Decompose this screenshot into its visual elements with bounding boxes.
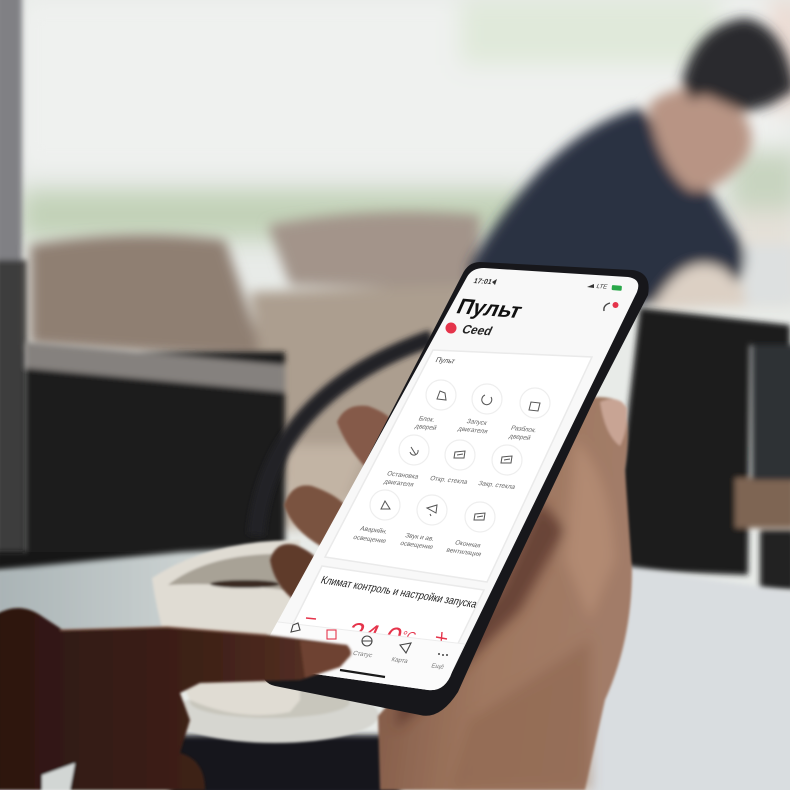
status bar <box>474 278 622 291</box>
finger two <box>284 485 345 547</box>
finger one <box>337 406 392 468</box>
button icons <box>381 391 540 520</box>
button labels: Откр. стекла <box>429 475 469 486</box>
home indicator <box>340 670 385 677</box>
button labels: Звук и ав. <box>404 532 436 543</box>
palm and thumb <box>378 397 632 790</box>
temperature value: 24.0 <box>341 617 407 654</box>
navigation labels <box>353 650 444 670</box>
status bar: LTE <box>595 283 608 291</box>
card: remote control <box>325 350 592 582</box>
screen title: Пульт <box>453 294 527 323</box>
button labels: двигателя <box>457 426 489 435</box>
man in the background <box>470 18 790 310</box>
button labels: двигателя <box>383 479 415 489</box>
coffee cup and saucer <box>152 540 379 743</box>
dark chair left <box>0 342 285 577</box>
navigation labels: Ещё <box>430 662 446 671</box>
thumb nail <box>600 399 627 446</box>
button labels: дверей <box>508 432 532 442</box>
card: climate control <box>293 565 485 643</box>
navigation labels: Статус <box>352 650 373 659</box>
button labels: Закр. стекла <box>477 480 517 491</box>
phone body <box>262 262 649 716</box>
button labels <box>352 415 538 558</box>
button labels: Разблок. <box>510 424 538 434</box>
vehicle selector: Ceed <box>460 323 495 338</box>
finger three <box>270 544 318 602</box>
bottom navigation <box>270 622 466 690</box>
wall on the left <box>0 0 27 570</box>
card heading: Пульт <box>434 355 457 365</box>
minus control <box>306 618 316 619</box>
climate heading: Климат контроль и настройки запуска <box>319 574 480 611</box>
dark chair right <box>256 308 790 590</box>
pointing hand <box>0 608 351 790</box>
shading on the hand <box>395 440 615 790</box>
button labels: вентиляция <box>445 547 483 558</box>
button labels: Оконная <box>454 540 482 550</box>
holding hand <box>270 397 632 790</box>
button labels: Остановка <box>386 471 420 481</box>
notification bell <box>604 302 618 311</box>
temperature value: °C <box>399 629 418 644</box>
button labels: освещение <box>399 540 435 551</box>
control buttons <box>370 380 550 532</box>
navigation icons <box>291 623 411 653</box>
button labels: освещение <box>352 534 388 545</box>
phone screen <box>240 268 638 700</box>
button labels: Блок. <box>417 415 436 424</box>
plus control <box>436 632 448 641</box>
button labels: дверей <box>414 422 438 432</box>
navigation labels: Карта <box>390 656 409 665</box>
vehicle selector <box>446 322 493 336</box>
status bar: 17:01 <box>472 276 494 286</box>
sofa <box>30 212 480 530</box>
button labels: Аварийн. <box>359 525 389 536</box>
table <box>0 545 790 790</box>
button labels: Запуск <box>465 418 488 427</box>
